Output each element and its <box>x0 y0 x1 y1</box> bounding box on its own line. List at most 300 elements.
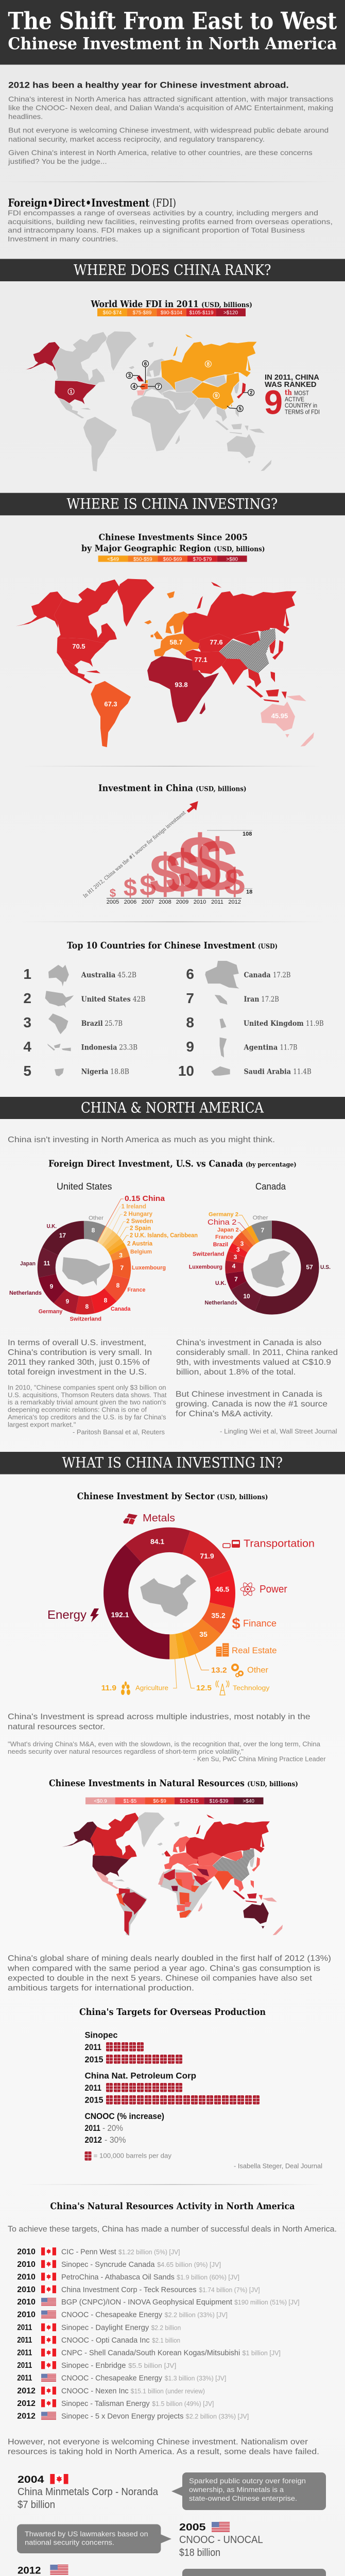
country silhouettes <box>45 961 239 1076</box>
dollar sign chart: investment in China: $ <box>178 820 221 907</box>
text column: Canada investment: billion, about 1.8% of the total. <box>176 1368 296 1377</box>
text column: US investment: In 2010, "Chinese companies spent only $3 billion on <box>8 1384 166 1391</box>
deal list: $2.1 billion <box>152 2337 180 2344</box>
sector commentary: natural resources sector. <box>8 1722 105 1731</box>
failed deal: 2004 Noranda: China Minmetals Corp - Noranda <box>18 2486 159 2498</box>
failed deal: 2012 Butter Creek: 2012 <box>18 2566 41 2576</box>
donut chart: Canada FDI: 3 <box>234 1253 237 1261</box>
donut chart: Canada FDI: 3 <box>236 1246 240 1253</box>
chart heading: world wide FDI <box>91 299 252 310</box>
top 10 countries panel: 11.4B <box>293 1068 312 1076</box>
barrels: Sinopec <box>106 2042 182 2064</box>
leader lines <box>106 1199 129 1242</box>
FDI definition: (FDI) <box>152 197 176 209</box>
deal list: 2012 <box>17 2386 36 2396</box>
legend: region ranges: $70-$79 <box>193 556 212 562</box>
callout: China ranked 9th: MOST <box>294 391 309 397</box>
region value labels: 67.3 <box>104 700 117 708</box>
text column: US investment: China's contribution is very small. In <box>8 1348 152 1357</box>
pictogram chart: overseas production targets: 2011 <box>84 2123 100 2133</box>
sector commentary: China's Investment is spread across multiple industries, most notably in the <box>8 1713 310 1721</box>
donut chart: Canada FDI: 4 <box>232 1263 236 1270</box>
top 10 countries panel: 42B <box>133 995 145 1004</box>
dollar sign chart: investment in China: 18 <box>246 889 252 895</box>
dollar sign chart: investment in China: 108 <box>243 831 252 837</box>
nationalism paragraph: However, not everyone is welcoming Chinese investment. Nationalism over <box>8 2438 308 2447</box>
dollar sign chart: investment in China: $ <box>166 838 199 905</box>
sector: other: Other <box>247 1666 269 1674</box>
deal list: Sinopec - Enbridge <box>61 2361 126 2370</box>
deal list: $2.2 billion (33%) [JV] <box>165 2312 228 2319</box>
FDI definition: FDI encompasses a range of overseas activities by a country, including mergers and <box>8 209 318 217</box>
sector: metals <box>123 1513 175 1524</box>
chart heading: FDI US vs Canada: United States <box>57 1181 112 1192</box>
callout: public outcry: state-owned Chinese enterprise. <box>189 2495 297 2502</box>
top 10 countries panel: Indonesia <box>81 1044 117 1052</box>
top 10 countries panel: 25.7B <box>105 1020 123 1028</box>
region value labels: 93.8 <box>175 681 188 688</box>
top 10 countries panel: 2 <box>23 990 31 1006</box>
FDI definition: acquisitions, building new facilities, reinvesting profits earned from overseas operations, <box>8 217 333 226</box>
legend: natural resources ranges: $6-$9 <box>153 1799 166 1804</box>
text column: Canada investment <box>176 1338 338 1435</box>
dollar sign chart: investment in China: $ <box>149 842 181 905</box>
deal list: CNPC - Shell Canada/South Korean Kogas/Mitsubishi <box>61 2349 240 2358</box>
chart heading: natural resources: Chinese Investments in Natural Resources <box>49 1778 245 1789</box>
map rank markers: 8 <box>207 362 210 367</box>
top 10 countries panel: Saudi Arabia <box>244 1068 291 1076</box>
sector: power: Power <box>260 1584 287 1595</box>
dollar sign chart: investment in China: 2010 <box>194 899 206 905</box>
dollar sign chart: investment in China: 2006 <box>124 899 136 905</box>
chart heading: investments by region: Chinese Investments Since 2005 <box>99 533 248 543</box>
pictogram chart: overseas production targets: China's Targets for Overseas Production <box>79 2007 266 2018</box>
callout: public outcry: Sparked public outcry over foreign <box>189 2477 306 2485</box>
legend: natural resources ranges: $1-$5 <box>124 1799 137 1804</box>
Canada outer labels: U.K. <box>215 1280 226 1286</box>
text column: US investment: U.S. acquisitions, Thomson Reuters data shows. That <box>8 1392 167 1399</box>
FDI definition: and intracompany loans. FDI makes up a significant proportion of Total Business <box>8 226 305 234</box>
failed deal: 2005 UNOCAL <box>17 2522 263 2558</box>
top 10 countries panel: United States <box>81 995 131 1004</box>
pictogram chart: overseas production targets: 2011 <box>84 2042 101 2052</box>
top 10 countries panel: 4 <box>23 1039 31 1055</box>
intro text block: Given China's interest in North America, relative to other countries, are these concerns <box>8 148 313 157</box>
deal list: BGP (CNPC)/ION - INOVA Geophysical Equipment <box>61 2298 233 2307</box>
legend: natural resources ranges: $10-$15 <box>180 1799 199 1804</box>
donut chart: United States FDI: 8 <box>104 1297 108 1304</box>
deal list: 2011 <box>17 2324 32 2332</box>
sector: finance: Finance <box>243 1618 277 1629</box>
US outer labels: Canada <box>111 1306 131 1312</box>
top 10 countries panel: Canada <box>244 971 271 979</box>
top 10 countries panel <box>23 940 324 1079</box>
sector values: 192.1 <box>111 1611 129 1619</box>
map rank markers: 7 <box>157 384 160 390</box>
top 10 countries panel: 5 <box>23 1063 31 1079</box>
dollar sign chart: investment in China: 2007 <box>142 899 154 905</box>
pictogram chart: overseas production targets <box>79 2007 322 2170</box>
lead sentence: China isn't investing in North America as much as you might think. <box>8 1136 275 1144</box>
US outer labels: Germany <box>39 1309 63 1315</box>
title banner <box>0 0 345 65</box>
text column: Canada investment: considerably small. In 2011, China ranked <box>176 1348 338 1357</box>
chart heading: investment in China: Investment in China <box>98 783 193 794</box>
mining commentary <box>7 1954 331 1993</box>
sector values: 35.2 <box>211 1612 226 1620</box>
legend: region ranges: $60-$69 <box>163 556 182 562</box>
Canada outer labels: Switzerland <box>193 1251 225 1257</box>
US outer labels: Belgium <box>130 1249 152 1255</box>
deal list: $4.65 billion (9%) [JV] <box>157 2261 221 2268</box>
Canada outer labels: Germany 2 <box>209 1212 238 1218</box>
legend: FDI ranges: $105-$119 <box>189 310 214 316</box>
section heading: where is China investing <box>0 493 345 515</box>
arrow annotation: In H1 2012, China was the #1 source for foreign investment <box>82 810 187 899</box>
Canada outer labels: France <box>215 1234 233 1241</box>
region value labels: 70.5 <box>72 642 85 650</box>
donut chart: United States FDI: 8 <box>116 1282 120 1289</box>
mining commentary: ambitious targets for international production. <box>8 1984 194 1993</box>
top 10 countries panel: 17.2B <box>261 995 279 1004</box>
legend: FDI ranges: $60-$74 <box>103 310 122 316</box>
pictogram chart: overseas production targets: 2015 <box>84 2095 103 2105</box>
deal list: 2010 <box>17 2298 36 2307</box>
section heading: what is China investing in <box>0 1452 345 1475</box>
callout: China ranked 9th: TERMS of FDI <box>285 410 320 416</box>
chart heading: investment in China: (USD, billions) <box>196 786 247 793</box>
donut chart: United States FDI: 3 <box>119 1252 123 1259</box>
donut chart: United States FDI: 8 <box>85 1303 89 1310</box>
sector: real estate <box>216 1643 277 1657</box>
sector: technology <box>196 1681 270 1695</box>
sector: power <box>240 1582 287 1597</box>
failed deal: 2005 UNOCAL: 2005 <box>179 2522 206 2533</box>
deal list: Sinopec - Syncrude Canada <box>61 2260 155 2269</box>
legend: FDI ranges: >$120 <box>223 310 238 316</box>
US outer labels: 2 Austria <box>127 1241 153 1247</box>
US outer labels: 0.15 China <box>125 1194 165 1203</box>
deal list: $1.5 billion (49%) [JV] <box>152 2400 214 2408</box>
intro text block: China's interest in North America has attracted significant attention, with major transactions <box>8 95 333 103</box>
sector: finance: $ <box>232 1616 240 1632</box>
sector: agriculture <box>101 1682 168 1695</box>
region value labels: 45.95 <box>271 712 288 720</box>
deal list: CNOOC - Chesapeake Energy <box>61 2311 162 2319</box>
donut chart: United States FDI: 17 <box>59 1232 66 1239</box>
pictogram chart: overseas production targets: - 20% <box>102 2123 123 2133</box>
intro text block: 2012 has been a healthy year for Chinese investment abroad. <box>8 81 289 90</box>
legend: natural resources ranges: $16-$39 <box>210 1799 229 1804</box>
deal list <box>17 2247 300 2420</box>
dollar sign chart: investment in China: 2011 <box>211 899 223 905</box>
region value labels: 58.7 <box>169 638 183 646</box>
dollar sign chart: investment in China: 2009 <box>176 899 188 905</box>
deal list: PetroChina - Athabasca Oil Sands <box>61 2273 175 2281</box>
legend: FDI ranges: $90-$104 <box>161 310 183 316</box>
top 10 countries panel: 9 <box>186 1039 194 1055</box>
sector: finance <box>232 1616 277 1632</box>
section heading: where does China rank <box>0 259 345 281</box>
map rank markers: 1 <box>70 389 73 395</box>
chart heading: world wide FDI: (USD, billions) <box>201 301 252 309</box>
chart heading: FDI US vs Canada: Canada <box>255 1181 286 1192</box>
top 10 countries panel: Top 10 Countries for Chinese Investment <box>67 940 255 951</box>
top 10 countries panel: 1 <box>23 966 31 982</box>
region value labels: 77.6 <box>210 638 223 646</box>
deal list: 2010 <box>17 2285 36 2294</box>
US outer labels: Switzerland <box>70 1316 101 1322</box>
dollar sign chart: investment in China: 2012 <box>228 899 241 905</box>
sector commentary: - Ken Su, PwC China Mining Practice Leader <box>193 1756 325 1763</box>
legend: natural resources ranges <box>85 1798 264 1804</box>
world map: FDI ranking <box>20 331 272 472</box>
sector: other <box>211 1665 269 1676</box>
failed deal: 2004 Noranda <box>18 2472 326 2511</box>
sector: real estate: Real Estate <box>232 1646 277 1655</box>
US outer labels: Netherlands <box>9 1290 42 1296</box>
text column: US investment: total foreign investment in the U.S. <box>8 1368 147 1377</box>
barrel key <box>84 2151 172 2161</box>
deal list: 2012 <box>17 2399 36 2408</box>
legend: region ranges: >$80 <box>226 556 238 562</box>
legend: natural resources ranges: >$40 <box>243 1799 254 1804</box>
sector: agriculture: Agriculture <box>135 1684 168 1692</box>
text column: US investment: America's top creditors and the U.S. is by far China's <box>8 1414 166 1421</box>
legend: FDI ranges: $75-$89 <box>133 310 152 316</box>
dollar sign chart: investment in China <box>82 801 252 907</box>
text column: US investment <box>8 1338 167 1436</box>
FDI definition <box>8 196 333 243</box>
sector values: 46.5 <box>215 1585 229 1593</box>
sector: transportation: Transportation <box>244 1538 315 1550</box>
barrel key: = 100,000 barrels per day <box>94 2153 172 2160</box>
chart heading: investments by region: by Major Geographic Region <box>81 544 211 554</box>
nationalism paragraph <box>8 2438 319 2456</box>
Canada outer labels: U.S. <box>320 1264 331 1270</box>
top 10 countries panel: 3 <box>23 1014 31 1030</box>
heading: natural resources activity: To achieve these targets, China has made a number of successful deals in North America. <box>8 2225 337 2233</box>
US outer labels: 2 Sweden <box>126 1218 153 1225</box>
map rank markers: 9 <box>215 393 218 399</box>
donut chart: Canada FDI: 7 <box>261 1227 265 1234</box>
deal list: 2011 <box>17 2361 32 2370</box>
nationalism paragraph: resources is taking hold in North America. As a result, some deals have failed. <box>8 2448 319 2456</box>
donut chart: Canada FDI: 10 <box>243 1293 250 1300</box>
donut chart: Canada FDI: 3 <box>240 1240 244 1247</box>
text column: Canada investment: - Lingling Wei et al, Wall Street Journal <box>220 1428 337 1435</box>
US outer labels: 1 Ireland <box>122 1204 146 1210</box>
intro text block: national security, market access reciprocity, and regulatory transparency. <box>8 135 265 143</box>
text column: US investment: deepening economic relations: China is one of <box>8 1406 147 1414</box>
heading: natural resources activity <box>8 2201 337 2233</box>
section heading: what is China investing in: WHAT IS CHINA INVESTING IN? <box>62 1454 283 1471</box>
US outer labels: Other <box>89 1215 104 1221</box>
Canada silhouette <box>251 1250 290 1288</box>
chart heading: FDI US vs Canada: (by percentage) <box>246 1161 297 1168</box>
deal list: $2.2 billion <box>151 2325 181 2332</box>
callout: China ranked 9th: 9 <box>264 383 283 421</box>
sector values <box>111 1537 229 1638</box>
section heading: where does China rank: WHERE DOES CHINA RANK? <box>74 262 271 278</box>
US outer labels: U.K. <box>47 1224 57 1230</box>
donut chart: Canada FDI <box>189 1212 331 1306</box>
chart heading: investment by sector: Chinese Investment by Sector <box>77 1491 215 1502</box>
pictogram chart: overseas production targets: 2015 <box>84 2055 103 2064</box>
deal list: CNOOC - Opti Canada Inc <box>61 2336 150 2345</box>
Canada outer labels: Other <box>253 1215 268 1221</box>
text column: Canada investment: growing. Canada is now the #1 source <box>176 1400 327 1409</box>
US outer labels: 2 U.K. Islands, Caribbean <box>130 1232 198 1239</box>
sector: technology: 12.5 <box>196 1684 212 1692</box>
text column: Canada investment: China's investment in Canada is also <box>176 1338 322 1347</box>
sector commentary <box>8 1713 325 1763</box>
donut chart: United States FDI <box>9 1194 198 1322</box>
chart heading: investments by region <box>81 533 265 554</box>
dollar sign chart: investment in China: $ <box>110 887 116 900</box>
deal list: $15.1 billion (under review) <box>131 2387 205 2395</box>
US outer labels: Luxembourg <box>132 1265 166 1271</box>
chart heading: investment by sector: (USD, billions) <box>217 1494 268 1501</box>
top 10 countries panel: 18.8B <box>110 1068 129 1076</box>
deal list: $1.74 billion (7%) [JV] <box>199 2286 260 2294</box>
map rank markers: 4 <box>133 384 136 390</box>
chart heading: investment in China <box>98 783 247 794</box>
donut chart: United States FDI: 7 <box>120 1264 124 1272</box>
pictogram chart: overseas production targets: Sinopec <box>84 2030 117 2040</box>
map rank markers: 5 <box>238 406 242 412</box>
top 10 countries panel: 8 <box>186 1014 194 1030</box>
callout: lawmakers <box>17 2524 171 2553</box>
top 10 countries panel: 11.9B <box>306 1020 324 1028</box>
sector commentary: needs security over natural resources regardless of short-term price volatility," <box>8 1748 244 1755</box>
section heading: where is China investing: WHERE IS CHINA INVESTING? <box>67 495 278 512</box>
title banner: Chinese Investment in North America <box>8 34 337 54</box>
deal list: $1.3 billion (33%) [JV] <box>165 2375 226 2382</box>
callout: China ranked 9th: WAS RANKED <box>265 381 316 389</box>
chart heading: FDI US vs Canada <box>48 1159 297 1192</box>
legend: natural resources ranges: <$0.9 <box>94 1799 107 1804</box>
donut chart: investment by sector <box>47 1513 315 1695</box>
top 10 countries panel: Brazil <box>81 1020 103 1028</box>
Canada outer labels: China 2 <box>208 1218 236 1227</box>
mining commentary: expected to double in the next 5 years. Chinese oil companies have also set <box>8 1974 313 1982</box>
callout: China ranked 9th: th <box>285 388 292 397</box>
intro text block: headlines. <box>8 112 43 121</box>
sector: agriculture: 11.9 <box>101 1684 116 1692</box>
text column: US investment: In terms of overall U.S. investment, <box>8 1338 146 1347</box>
top 10 countries panel: Nigeria <box>81 1068 108 1076</box>
deal list: $1.9 billion (60%) [JV] <box>177 2274 239 2281</box>
chart heading: natural resources: (USD, billions) <box>247 1781 298 1788</box>
callout: China ranked 9th: COUNTRY in <box>285 403 317 409</box>
deal list: $2.2 billion (33%) [JV] <box>186 2413 249 2420</box>
deal list: CIC - Penn West <box>61 2247 116 2256</box>
text column: US investment: largest export market." <box>8 1421 76 1428</box>
callout: public outcry: ownership, as Minmetals is a <box>189 2486 284 2494</box>
Canada outer labels: Brazil <box>213 1242 228 1248</box>
pictogram chart: overseas production targets: - Isabella Steger, Deal Journal <box>234 2162 322 2170</box>
Canada outer labels: Netherlands <box>204 1300 237 1306</box>
map rank markers: 6 <box>144 362 147 367</box>
intro text block: But not everyone is welcoming Chinese investment, with widespread public debate around <box>8 126 329 134</box>
title banner: The Shift From East to West <box>8 7 337 35</box>
callout: public outcry <box>171 2472 326 2510</box>
dollar sign chart: investment in China: $ <box>140 869 156 902</box>
deal list: 2010 <box>17 2260 36 2269</box>
failed deal: 2005 UNOCAL: CNOOC - UNOCAL <box>179 2534 263 2546</box>
sector commentary: "What's driving China's M&A, even with the slowdown, is the recognition that, over the long term, China <box>8 1741 320 1748</box>
deal list: 2011 <box>17 2336 32 2345</box>
dollar sign chart: investment in China: 2005 <box>107 899 119 905</box>
intro text block <box>8 81 333 165</box>
donut chart: United States FDI: 9 <box>65 1298 69 1305</box>
donut chart: Canada FDI: 7 <box>234 1276 238 1283</box>
country overlays on resources map <box>116 1869 209 1936</box>
region value labels <box>72 638 288 720</box>
top 10 countries panel: (USD) <box>258 943 278 951</box>
world map: natural resources <box>62 1812 283 1936</box>
Canada outer labels: Japan 2 <box>217 1227 239 1233</box>
sector values: 71.9 <box>200 1552 214 1560</box>
deal list: Sinopec - Daylight Energy <box>61 2324 149 2332</box>
section heading: China and North America: CHINA & NORTH AMERICA <box>81 1099 264 1116</box>
dollar sign chart: investment in China: $ <box>124 874 137 901</box>
top 10 countries panel: 45.2B <box>117 971 136 979</box>
US outer labels: France <box>127 1287 145 1293</box>
US outer labels: Japan <box>20 1261 36 1267</box>
Canada outer labels <box>189 1212 331 1306</box>
sector values: 84.1 <box>150 1537 164 1546</box>
US outer labels: 2 Spain <box>130 1225 151 1231</box>
deal list: 2011 <box>17 2374 32 2383</box>
top 10 countries panel: 23.3B <box>119 1044 137 1052</box>
legend: FDI ranges <box>97 308 246 316</box>
chart heading: FDI US vs Canada: Foreign Direct Investment, U.S. vs Canada <box>48 1159 243 1170</box>
world map: investment by region <box>16 579 314 747</box>
failed deal: 2012 Butter Creek <box>18 2565 326 2576</box>
pictogram chart: overseas production targets: 2012 <box>84 2135 102 2145</box>
legend: region ranges <box>98 555 247 562</box>
intro text block: like the CNOOC- Nexen deal, and Dalian Wanda's acquisition of AMC Entertainment, making <box>8 104 333 112</box>
sector: other: 13.2 <box>211 1666 227 1674</box>
top 10 countries panel: Agentina <box>243 1044 278 1052</box>
map rank markers <box>68 361 254 412</box>
deal list: 2012 <box>17 2412 36 2420</box>
top 10 countries panel: 17.2B <box>273 971 290 979</box>
chart heading: investments by region: (USD, billions) <box>214 546 265 553</box>
deal list: China Investment Corp - Teck Resources <box>61 2285 197 2294</box>
sector: metals: Metals <box>143 1513 175 1524</box>
legend: region ranges: $50-$59 <box>133 556 152 562</box>
deal list: $1 billion [JV] <box>242 2350 281 2357</box>
sector values: 35 <box>199 1630 208 1638</box>
pictogram chart: overseas production targets: China Nat. Petroleum Corp <box>84 2071 196 2080</box>
sector: technology: Technology <box>233 1684 270 1692</box>
text column: US investment: 2011 they ranked 30th, just 0.15% of <box>8 1358 150 1367</box>
top 10 countries panel: 6 <box>186 966 194 982</box>
failed deal: 2004 Noranda: 2004 <box>18 2475 44 2485</box>
top 10 countries panel: United Kingdom <box>244 1020 304 1028</box>
US silhouette <box>62 1257 110 1286</box>
map rank markers: 3 <box>128 373 131 379</box>
donut chart: United States FDI: 9 <box>50 1283 54 1290</box>
donut chart: United States FDI: 8 <box>92 1227 95 1234</box>
intro text block: justified? You be the judge... <box>8 157 107 165</box>
barrels: China National Petroleum <box>106 2083 260 2105</box>
text column: US investment: is a remarkably trivial amount given the two nation's <box>8 1399 166 1406</box>
deal list: 2010 <box>17 2311 36 2319</box>
